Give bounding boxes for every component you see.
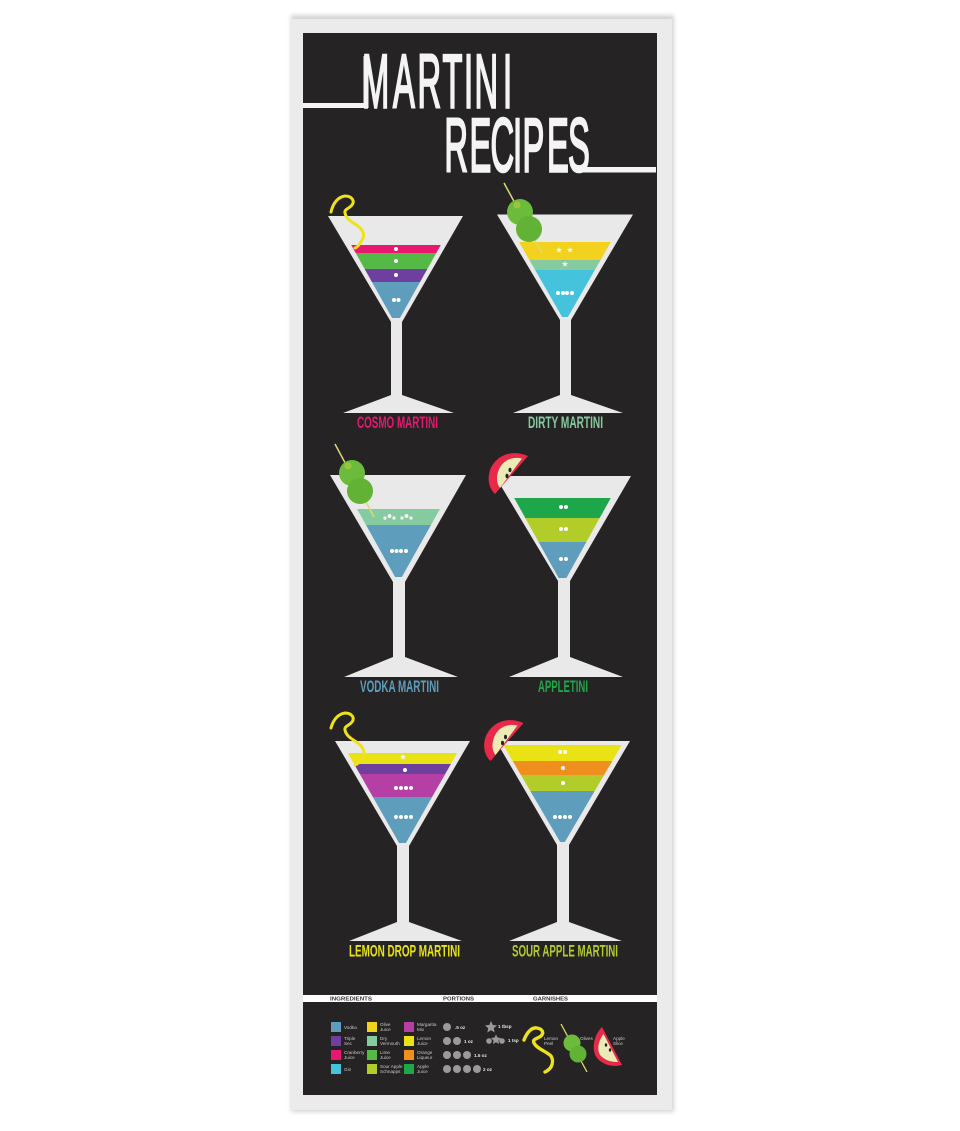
legend dark panel [303, 1002, 657, 1095]
legend: ingredients: Mix [417, 1027, 425, 1032]
legend: ingredients: Juice [344, 1055, 355, 1060]
legend: ingredients: Triple [344, 1036, 356, 1041]
icon: apple slice [594, 1027, 622, 1066]
portion markers [556, 247, 574, 295]
legend: ingredients: Sour Apple [380, 1064, 403, 1069]
title line: RECIPES: RECIPES [444, 104, 590, 188]
cocktail: Vodka Martini [330, 444, 466, 696]
legend: ingredients: Dry [380, 1036, 388, 1041]
legend: portions: .5 oz [455, 1025, 466, 1030]
legend: ingredients: Liqueur [417, 1055, 433, 1060]
apple slice label [613, 1036, 625, 1046]
liquid layers [348, 753, 458, 843]
legend: ingredients: Juice [380, 1055, 391, 1060]
legend: ingredients: Lemon [417, 1036, 431, 1041]
legend: ingredients: Juice [417, 1041, 428, 1046]
cocktail: Cosmo Martini [328, 196, 463, 432]
title rule right [582, 167, 656, 172]
legend: ingredients: Olive [380, 1022, 391, 1027]
legend divider band [303, 995, 657, 1002]
legend: ingredients: Schnapps [380, 1069, 401, 1074]
lemon peel label [544, 1036, 558, 1046]
legend: ingredients: Sec [344, 1041, 353, 1046]
icon: apple slice [489, 453, 528, 494]
glass [495, 476, 631, 677]
olives label: Olives [580, 1036, 593, 1041]
title line: MARTINI: MARTINI [362, 40, 512, 124]
legend: portions: 2 oz [483, 1067, 493, 1072]
liquid layers [357, 509, 440, 577]
liquid layers [351, 245, 441, 318]
liquid layers [514, 498, 611, 578]
legend: ingredients: Juice [417, 1069, 428, 1074]
portion markers [559, 505, 568, 561]
icon: olives [561, 1024, 587, 1072]
label: APPLETINI [538, 678, 588, 696]
icon: lemon peel [331, 196, 364, 248]
title rule left [303, 56, 366, 106]
legend: portions: 1 oz [464, 1039, 474, 1044]
legend section headings [330, 996, 568, 1002]
legend: ingredients: Orange [417, 1050, 433, 1055]
portion markers [383, 514, 413, 553]
glass [330, 475, 466, 677]
legend section headings: INGREDIENTS [330, 996, 372, 1002]
poster paper [290, 19, 672, 1110]
glass [496, 741, 630, 941]
cocktail: Lemon Drop Martini [331, 713, 470, 960]
glass [497, 214, 633, 413]
legend: portions: 1 tbsp [498, 1024, 512, 1029]
legend: ingredients: Vodka [344, 1025, 357, 1030]
icon: lemon peel [331, 713, 364, 765]
legend: portions: 1.5 oz [474, 1053, 487, 1058]
legend: ingredients: Juice [380, 1027, 391, 1032]
label: VODKA MARTINI [360, 678, 439, 696]
liquid layers [519, 242, 611, 317]
lemon peel label: Peel [544, 1041, 553, 1046]
apple slice label: Slice [613, 1041, 623, 1046]
portion markers [553, 750, 572, 819]
title [303, 40, 656, 188]
label: SOUR APPLE MARTINI [512, 942, 618, 960]
legend: portions: 1 tsp [508, 1038, 519, 1043]
legend: ingredients: Apple [417, 1064, 429, 1069]
paper shadow [291, 15, 674, 1112]
legend section headings: GARNISHES [533, 996, 568, 1002]
legend section headings: PORTIONS [443, 996, 474, 1002]
cocktail: Dirty Martini [497, 183, 633, 432]
legend: ingredients: Lime [380, 1050, 390, 1055]
glass [328, 216, 463, 413]
legend: portions [443, 1021, 519, 1073]
label: COSMO MARTINI [357, 414, 438, 432]
icon: apple slice [484, 720, 524, 761]
legend: garnishes [524, 1024, 625, 1072]
label: DIRTY MARTINI [528, 414, 603, 432]
legend: ingredients [331, 1022, 437, 1074]
legend: ingredients: Gin [344, 1067, 352, 1072]
lemon peel label: Lemon [544, 1036, 558, 1041]
icon: olives on pick [504, 183, 542, 253]
cocktail: Sour Apple Martini [484, 720, 630, 960]
liquid layers [500, 745, 625, 842]
legend: ingredients: Vermouth [380, 1041, 400, 1046]
main dark panel [303, 33, 657, 995]
icon: olives on pick [335, 444, 374, 517]
legend: ingredients: Margarita [417, 1022, 437, 1027]
portion markers [392, 247, 400, 302]
glass [335, 741, 470, 941]
label: LEMON DROP MARTINI [349, 942, 460, 960]
apple slice label: Apple [613, 1036, 625, 1041]
portion markers [394, 754, 413, 819]
cocktail: Appletini [489, 453, 631, 696]
icon: lemon peel [524, 1028, 553, 1072]
legend: ingredients: Cranberry [344, 1050, 365, 1055]
